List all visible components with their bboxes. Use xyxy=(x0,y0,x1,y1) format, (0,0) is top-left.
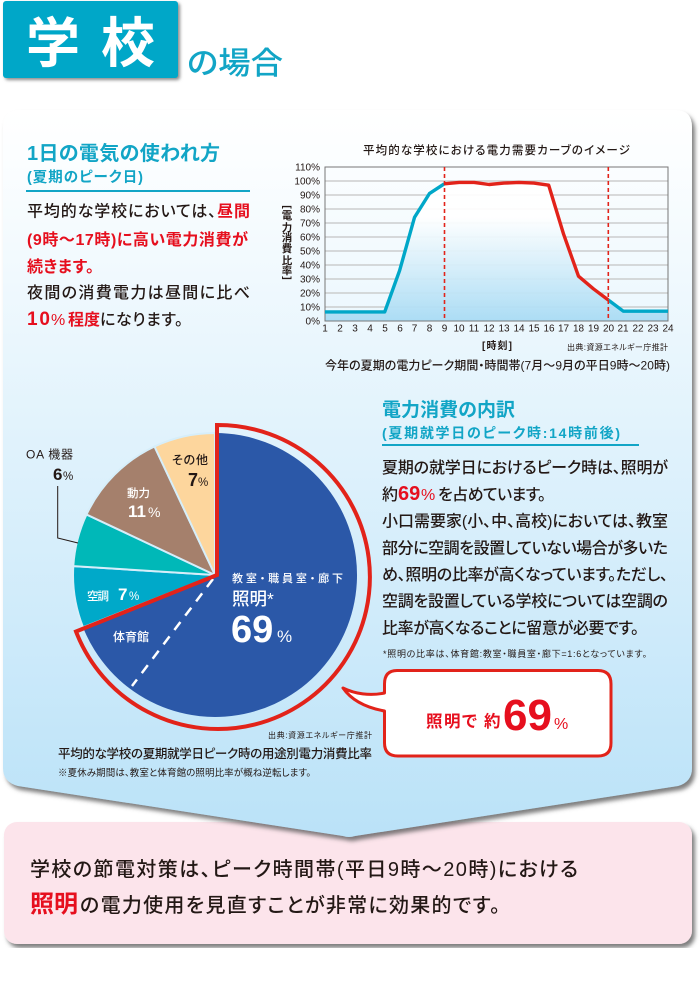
y axis labels xyxy=(294,162,320,328)
x axis labels: 14 xyxy=(513,324,525,334)
body text: daily usage: 夜間の消費電力は昼間に比べ xyxy=(27,284,250,302)
x axis labels: 11 xyxy=(469,324,480,334)
x axis labels: 20 xyxy=(603,324,614,334)
body text: daily usage xyxy=(27,202,250,330)
y axis title: 力 xyxy=(282,221,292,234)
body text: breakdown: 小口需要家(小、中、高校)においては、教室 xyxy=(382,512,668,530)
x axis labels: 23 xyxy=(647,324,659,334)
red outline xyxy=(76,425,370,729)
footnote: lighting ratio: *照明の比率は、体育館:教室・職員室・廊下=1:6となっています。 xyxy=(383,648,647,659)
x axis labels: 3 xyxy=(352,324,358,334)
y axis labels: 50% xyxy=(300,246,320,258)
callout: lighting about 69% xyxy=(343,670,611,756)
title badge xyxy=(3,1,180,80)
body text: daily usage: % xyxy=(51,312,65,329)
callout: lighting about 69%: 照明で xyxy=(426,713,477,731)
pie labels: 体育館 xyxy=(113,629,149,644)
y axis labels: 40% xyxy=(300,260,320,272)
x axis labels: 8 xyxy=(427,324,433,334)
body text: breakdown xyxy=(382,458,668,638)
body text: daily usage: 程度 xyxy=(68,310,100,329)
y axis title: 電 xyxy=(282,210,293,222)
OA equipment label xyxy=(26,448,78,543)
x axis labels: 22 xyxy=(632,324,644,334)
OA equipment label: 6 xyxy=(53,465,62,484)
conclusion line 2: の電力使用を見直すことが非常に効果的です。 xyxy=(80,894,500,917)
y axis labels: 70% xyxy=(300,218,320,230)
panel: breakdown text xyxy=(382,399,668,659)
pie source: 出典:資源エネルギー庁推計 xyxy=(268,730,372,740)
curve: peak segment xyxy=(444,182,608,300)
x axis labels: 5 xyxy=(382,324,388,334)
pie labels: 教室・職員室・廊下 xyxy=(232,571,343,585)
line chart: demand curve xyxy=(281,143,674,372)
heading: daily usage: 1日の電気の使われ方 xyxy=(27,142,220,165)
title suffix: の場合 xyxy=(187,46,283,81)
pie labels xyxy=(87,453,343,651)
dashed divider: gym xyxy=(132,579,213,686)
y axis labels: 20% xyxy=(300,288,320,300)
y axis labels: 0% xyxy=(306,316,320,328)
y axis title: [ xyxy=(281,205,293,209)
source: chart: 出典:資源エネルギー庁推計 xyxy=(567,342,668,352)
curve: off-peak segments xyxy=(325,184,668,312)
body text: daily usage: 10 xyxy=(27,309,50,330)
pie labels: % xyxy=(198,477,208,489)
x axis labels: 16 xyxy=(543,324,555,334)
slice: power xyxy=(86,446,215,575)
y axis labels: 90% xyxy=(300,190,320,202)
body text: breakdown: % xyxy=(421,487,435,504)
pie caption: 平均的な学校の夏期就学日ピーク時の用途別電力消費比率 xyxy=(58,746,372,761)
subheading: breakdown: (夏期就学日のピーク時:14時前後) xyxy=(382,425,620,441)
pie labels: 7 xyxy=(118,585,127,604)
body text: daily usage: 平均的な学校においては、昼間 xyxy=(27,202,250,220)
subheading: summer peak day: (夏期のピーク日) xyxy=(27,169,143,186)
body text: breakdown: 69 xyxy=(398,483,420,505)
slice: OA equipment xyxy=(73,514,215,575)
chart area fill xyxy=(325,182,668,321)
body text: breakdown: 空調を設置している学校については空調の xyxy=(382,592,668,610)
x axis labels: 24 xyxy=(662,324,674,334)
pie labels: その他 xyxy=(172,453,208,467)
pie labels: 69 xyxy=(231,609,273,651)
x axis labels: 10 xyxy=(453,324,465,334)
x axis labels: 13 xyxy=(498,324,510,334)
x axis labels: 12 xyxy=(483,324,495,334)
chart caption: 今年の夏期の電力ピーク期間・時間帯(7月〜9月の平日9時〜20時) xyxy=(325,358,670,372)
pie labels: % xyxy=(148,504,160,520)
slice: other xyxy=(154,433,215,575)
body text: breakdown: 部分に空調を設置していない場合が多いた xyxy=(382,538,668,558)
x axis labels: 9 xyxy=(442,324,448,334)
y axis labels: 10% xyxy=(300,302,320,314)
body text: breakdown: 夏期の就学日におけるピーク時は、照明が xyxy=(382,458,668,477)
title badge: 学 xyxy=(26,14,80,74)
body text: daily usage: になります。 xyxy=(100,311,183,329)
callout: lighting about 69%: 69 xyxy=(503,691,552,740)
y axis title: ] xyxy=(281,276,293,280)
body text: daily usage: (9時〜17時)に高い電力消費が xyxy=(27,230,248,249)
conclusion line 2: 照明 xyxy=(30,891,78,918)
y axis labels: 60% xyxy=(300,232,320,244)
y axis labels: 100% xyxy=(294,176,320,188)
x axis labels: 7 xyxy=(412,324,418,334)
main panel with arrow xyxy=(3,110,692,837)
x axis labels: 19 xyxy=(588,324,599,334)
x axis labels: 4 xyxy=(367,324,373,334)
x axis labels: 6 xyxy=(397,324,403,334)
y axis title: 費 xyxy=(282,242,293,255)
x axis labels: 17 xyxy=(558,324,569,334)
OA equipment label: OA 機器 xyxy=(26,448,73,462)
OA equipment label: % xyxy=(63,471,73,483)
pie note: ※夏休み期間は、教室と体育館の照明比率が概ね逆転します。 xyxy=(58,767,311,779)
heading: breakdown: 電力消費の内訳 xyxy=(382,399,515,421)
slice: lighting xyxy=(83,433,357,717)
y axis labels: 110% xyxy=(295,162,320,174)
y axis labels: 80% xyxy=(300,204,320,216)
y axis title: 消 xyxy=(282,231,293,244)
pie labels: 11 xyxy=(128,502,146,521)
pie labels: 7 xyxy=(188,470,198,490)
peak period markers xyxy=(444,167,608,321)
body text: breakdown: 比率が高くなることに留意が必要です。 xyxy=(382,618,639,638)
pie labels: % xyxy=(129,591,139,603)
x axis title: [時刻] xyxy=(482,339,512,352)
title badge: 校 xyxy=(101,14,155,74)
x axis labels: 2 xyxy=(337,324,343,334)
y axis title: 率 xyxy=(282,264,293,277)
pie labels: 照明* xyxy=(232,589,274,609)
chart title: 平均的な学校における電力需要カーブのイメージ xyxy=(363,143,630,157)
x axis labels: 1 xyxy=(322,324,328,334)
body text: daily usage: 続きます。 xyxy=(27,258,94,276)
pie labels: 動力 xyxy=(127,486,150,500)
body text: breakdown: 約 xyxy=(382,486,398,504)
body text: breakdown: を占めています。 xyxy=(438,486,546,504)
conclusion panel background xyxy=(4,822,692,944)
body text: breakdown: め、照明の比率が高くなっています。ただし、 xyxy=(382,565,668,584)
pie labels: 空調 xyxy=(87,589,109,603)
pie chart: usage breakdown xyxy=(26,425,370,729)
pie labels: % xyxy=(277,627,292,646)
callout: lighting about 69%: % xyxy=(554,716,568,733)
callout: lighting about 69%: 約 xyxy=(484,712,500,731)
slice: air conditioning xyxy=(73,566,215,627)
y axis title: 比 xyxy=(282,254,293,267)
x axis labels: 15 xyxy=(528,324,540,334)
x axis labels xyxy=(322,324,674,334)
x axis labels: 21 xyxy=(617,324,629,334)
y axis title xyxy=(281,205,293,280)
panel: conclusion text xyxy=(30,858,578,918)
conclusion line 1: 学校の節電対策は、ピーク時間帯(平日9時〜20時)における xyxy=(30,858,578,881)
y axis labels: 30% xyxy=(300,274,320,286)
panel: daily usage text xyxy=(26,142,250,330)
x axis labels: 18 xyxy=(573,324,584,334)
